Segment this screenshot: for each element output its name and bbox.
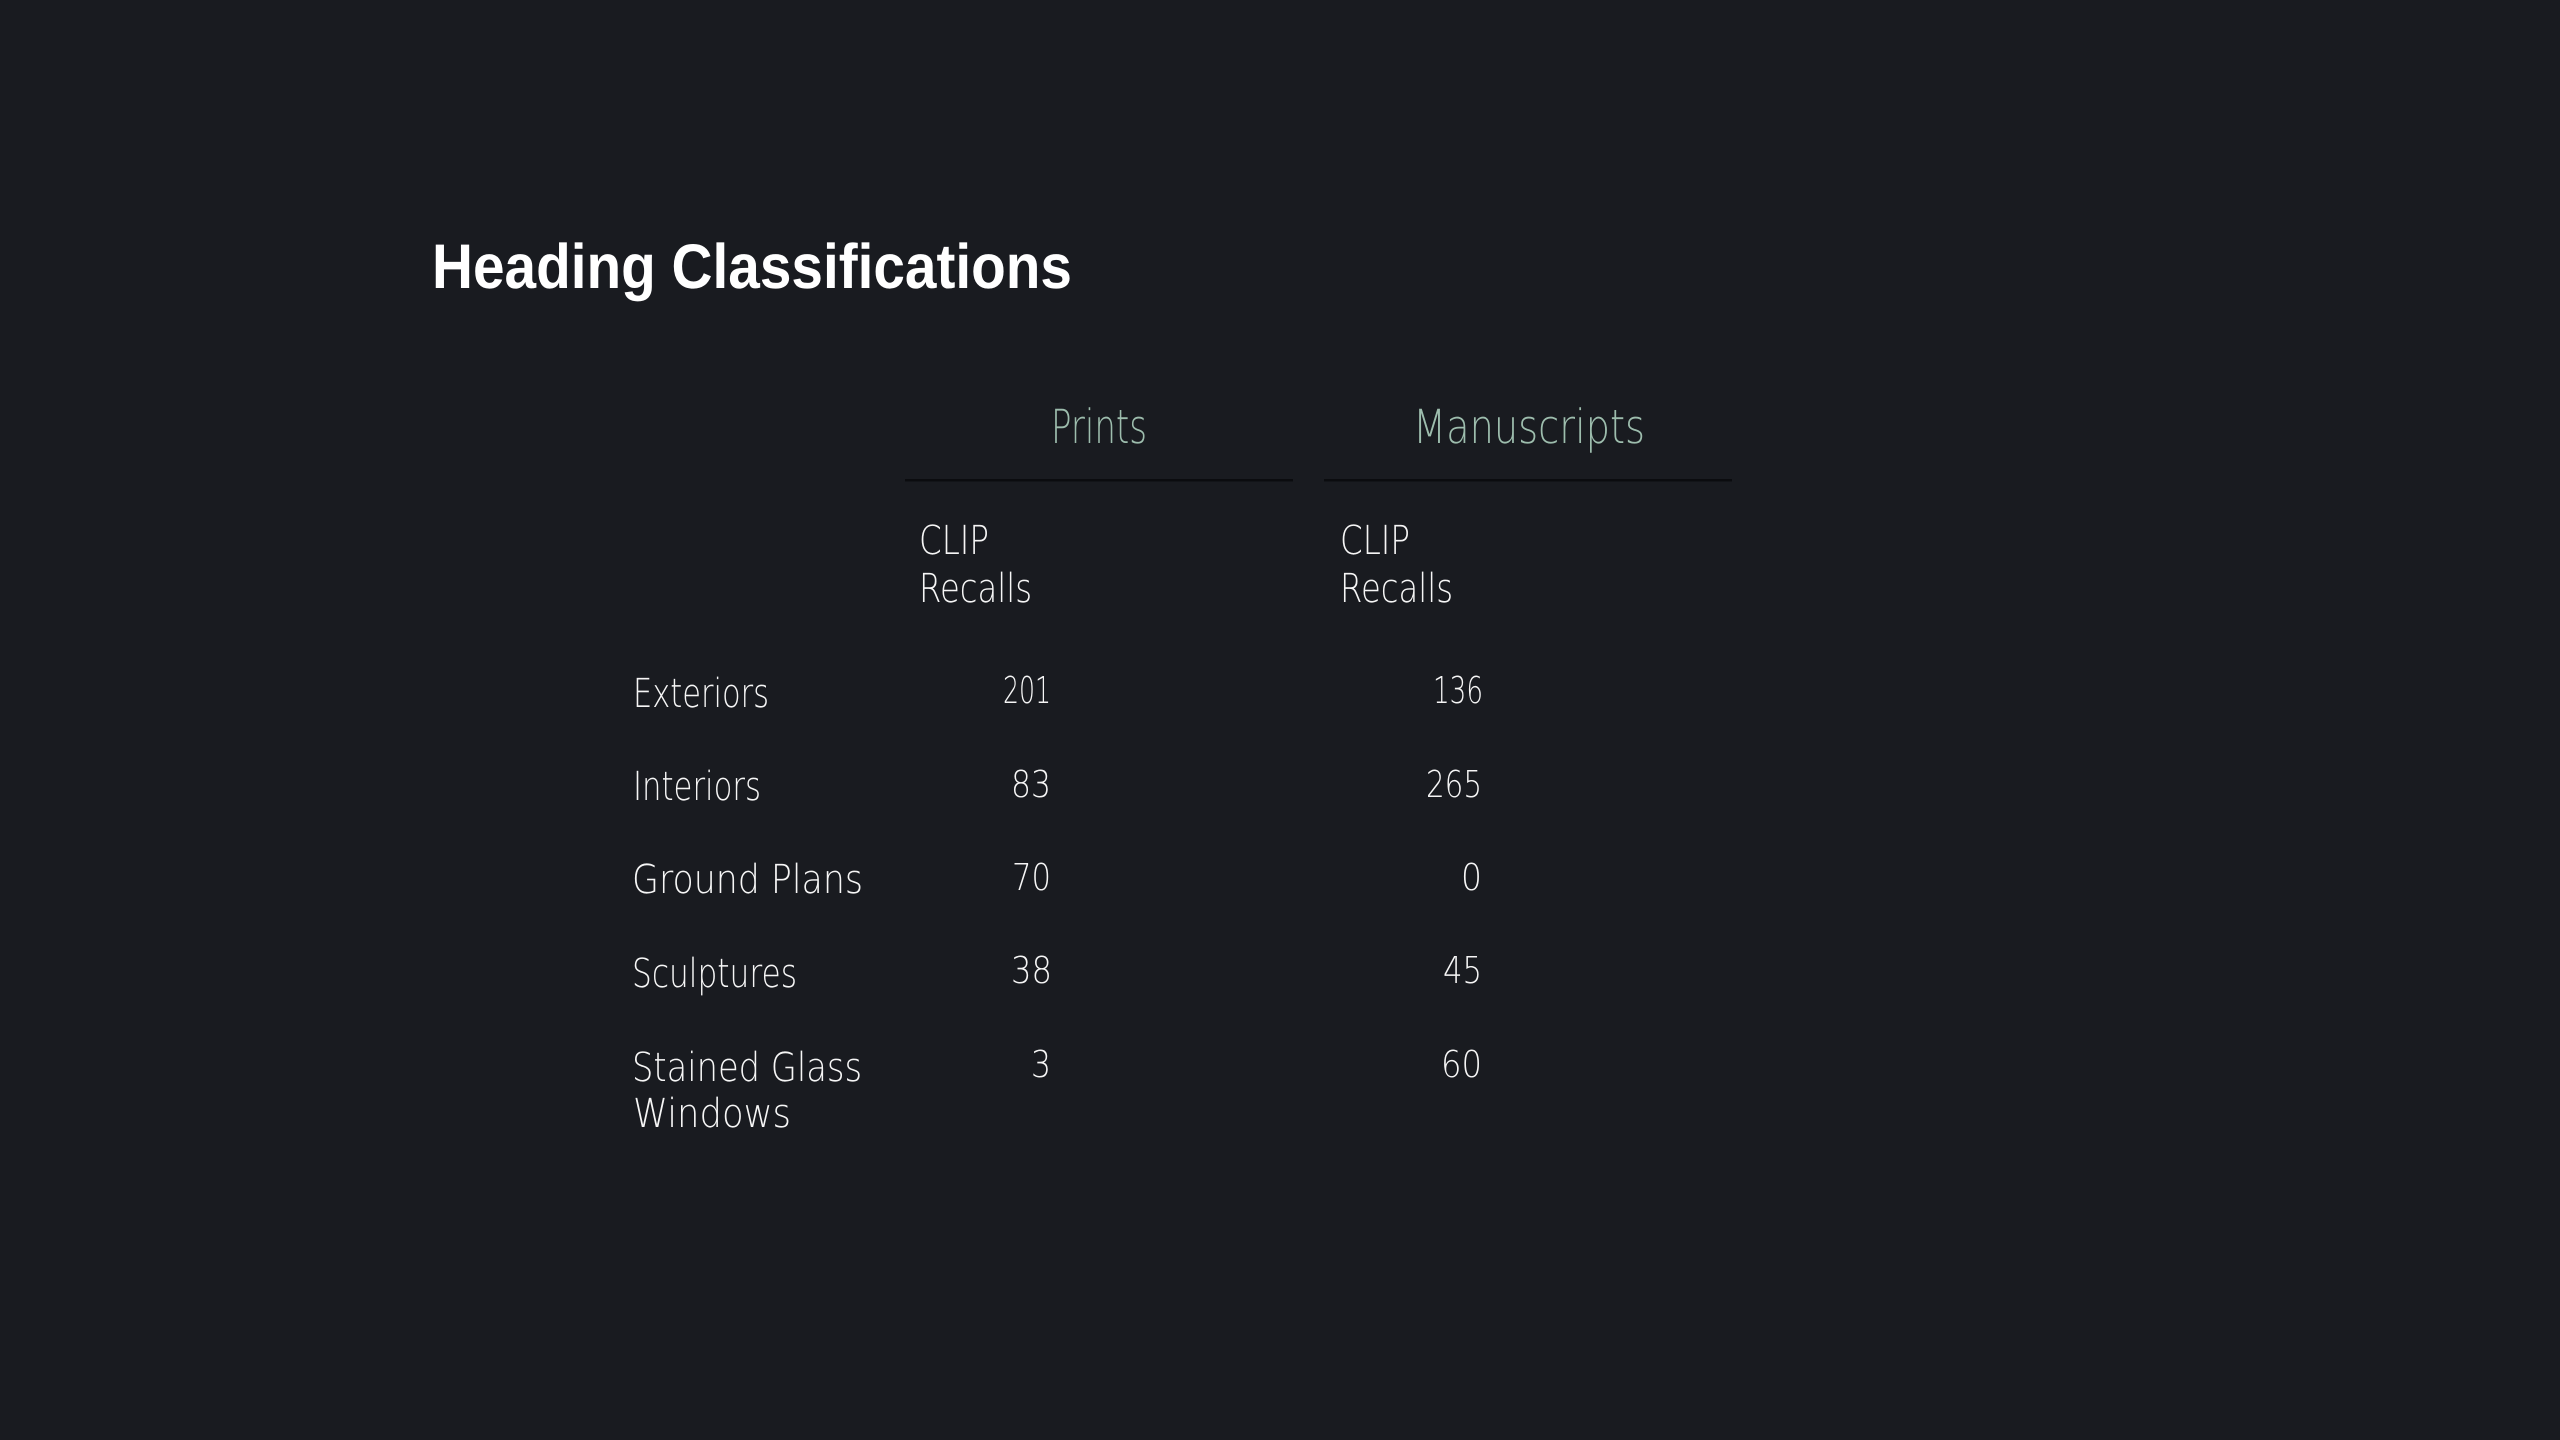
row: Stained Glass Windows: 60 bbox=[1441, 1043, 1482, 1086]
column header: Manuscripts: Manuscripts bbox=[1413, 400, 1645, 455]
column header: Prints: Prints bbox=[1051, 400, 1147, 455]
row: Sculptures: Sculptures bbox=[632, 951, 797, 997]
row: Sculptures: 38 bbox=[1011, 949, 1052, 992]
row: Interiors: 83 bbox=[1011, 763, 1051, 806]
row: Exteriors: 136 bbox=[1433, 669, 1483, 712]
row: Ground Plans: 0 bbox=[1461, 856, 1482, 899]
row: Exteriors: 201 bbox=[1003, 669, 1051, 712]
sub-header: Prints CLIP Recalls: CLIP bbox=[919, 518, 989, 564]
row: Stained Glass Windows bbox=[632, 1043, 1482, 1137]
row: Stained Glass Windows: 3 bbox=[1031, 1043, 1051, 1086]
row: Sculptures: 45 bbox=[1443, 949, 1482, 992]
row: Interiors bbox=[633, 763, 1482, 810]
row: Exteriors bbox=[633, 669, 1483, 717]
sub-header: Prints CLIP Recalls: Recalls bbox=[919, 566, 1032, 612]
row: Ground Plans: Ground Plans bbox=[632, 857, 863, 903]
row: Ground Plans: 70 bbox=[1012, 856, 1051, 899]
sub-header: Manuscripts CLIP Recalls: Recalls bbox=[1340, 566, 1453, 612]
row: Interiors: Interiors bbox=[633, 764, 761, 810]
sub-header: Manuscripts CLIP Recalls bbox=[1340, 518, 1453, 612]
row: Stained Glass Windows: Stained Glass bbox=[632, 1045, 862, 1091]
row: Sculptures bbox=[632, 949, 1482, 997]
title: Heading Classifications bbox=[432, 232, 1072, 302]
row: Stained Glass Windows: Windows bbox=[633, 1091, 791, 1137]
row: Exteriors: Exteriors bbox=[633, 671, 769, 717]
row: Interiors: 265 bbox=[1426, 763, 1482, 806]
row: Ground Plans bbox=[632, 856, 1482, 903]
sub-header: Prints CLIP Recalls bbox=[919, 518, 1032, 612]
sub-header: Manuscripts CLIP Recalls: CLIP bbox=[1340, 518, 1410, 564]
